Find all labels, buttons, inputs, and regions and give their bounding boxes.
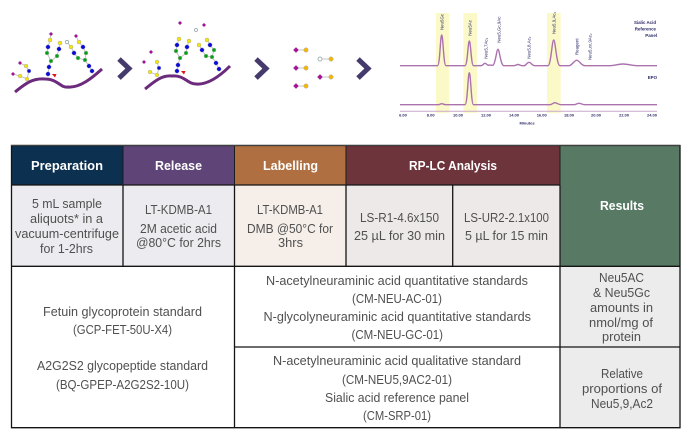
workflow table bbox=[11, 145, 680, 428]
text: relative result bbox=[582, 367, 663, 411]
text: relative result: Relative bbox=[601, 367, 643, 381]
text: release method: @80°C for 2hrs bbox=[136, 236, 221, 250]
text: preparation method bbox=[15, 197, 119, 256]
chromatogram chart: Panel bbox=[645, 33, 657, 38]
heading: RP-LC Analysis: RP-LC Analysis bbox=[409, 158, 497, 173]
chromatogram chart: Reagent bbox=[574, 38, 579, 55]
text: quantitative standards: (CM-NEU-GC-01) bbox=[352, 328, 443, 342]
text: preparation method: vacuum-centrifuge bbox=[15, 227, 119, 241]
chromatogram chart: Reference bbox=[635, 26, 657, 32]
text: qualitative standards bbox=[273, 354, 521, 423]
text: labelling method: DMB @50°C for bbox=[247, 222, 333, 236]
chromatogram chart: Neu5,Gc,9Ac bbox=[496, 16, 501, 43]
text: quantitative standards bbox=[264, 274, 531, 342]
text: column UR2: 5 µL for 15 min bbox=[465, 229, 548, 243]
panel: method cell fills bbox=[11, 185, 680, 428]
text: qualitative standards: N-acetylneuraminic acid qualitative standard bbox=[273, 354, 521, 368]
text: glycoprotein standards: A2G2S2 glycopeptide standard bbox=[37, 359, 208, 373]
text: release method: 2M acetic acid bbox=[140, 222, 217, 236]
trace: EPO bbox=[400, 73, 657, 105]
text: quantitative result: nmol/mg of bbox=[589, 316, 654, 330]
text: qualitative standards: (CM-SRP-01) bbox=[363, 409, 431, 423]
text: preparation method: 5 mL sample bbox=[32, 197, 102, 211]
chromatogram chart: 18.00 bbox=[564, 112, 575, 118]
chromatogram chart: Neu5,8,Ac₂ bbox=[527, 36, 532, 59]
text: column R1: 25 µL for 30 min bbox=[354, 229, 445, 243]
text: column R1: LS-R1-4.6x150 bbox=[360, 211, 439, 225]
chromatogram chart: 24.00 bbox=[647, 112, 658, 118]
text: qualitative standards: Sialic acid reference panel bbox=[325, 391, 469, 405]
text: relative result: proportions of bbox=[582, 382, 663, 396]
chromatogram chart: Neu5Ac bbox=[467, 19, 472, 36]
text: glycoprotein standards: (GCP-FET-50U-X4) bbox=[73, 323, 172, 337]
chromatogram chart: 16.00 bbox=[537, 112, 547, 118]
chromatogram chart: 6.00 bbox=[399, 112, 408, 118]
text: quantitative result: Neu5AC bbox=[599, 271, 644, 285]
heading: Release: Release bbox=[155, 158, 202, 173]
icon: glycoprotein with released sialic acids bbox=[142, 21, 230, 89]
legend labels: Sialic Acid bbox=[634, 20, 656, 25]
text: glycoprotein standards: Fetuin glycoprotein standard bbox=[43, 305, 202, 319]
grid lines bbox=[12, 146, 680, 428]
text: column UR2: LS-UR2-2.1x100 bbox=[464, 211, 549, 225]
text: column R1 bbox=[354, 211, 445, 243]
chromatogram chart: 20.00 bbox=[591, 112, 602, 118]
chromatogram chart: 12.00 bbox=[481, 112, 492, 118]
chromatogram chart: Minutes bbox=[519, 120, 535, 126]
text: preparation method: for 1-2hrs bbox=[40, 242, 93, 256]
text: qualitative standards: (CM-NEU5,9AC2-01) bbox=[342, 373, 452, 387]
text: quantitative result: protein bbox=[602, 330, 641, 344]
chromatogram chart: Neu5,9,Ac₂ bbox=[552, 11, 557, 34]
trace: sialic acid reference panel bbox=[400, 35, 657, 66]
chromatogram chart bbox=[399, 11, 658, 126]
peak labels: Neu5Gc bbox=[440, 13, 444, 30]
panel: header fills bbox=[11, 145, 680, 266]
icon: intact glycoprotein with sialic acids bbox=[11, 32, 102, 92]
chromatogram chart: 14.00 bbox=[509, 112, 520, 118]
arrow: step one bbox=[119, 59, 129, 78]
text: column UR2 bbox=[464, 211, 549, 243]
chromatogram chart: EPO bbox=[648, 75, 658, 80]
icon: labelled sialic acids bbox=[293, 47, 333, 89]
text: labelling method: 3hrs bbox=[278, 236, 303, 250]
text: release method: LT-KDMB-A1 bbox=[145, 203, 212, 217]
text: quantitative standards: (CM-NEU-AC-01) bbox=[352, 292, 442, 306]
text: quantitative standards: N-acetylneuraminic acid quantitative standards bbox=[266, 274, 528, 288]
text: labelling method: LT-KDMB-A1 bbox=[257, 203, 323, 217]
chromatogram chart: 22.00 bbox=[619, 112, 630, 118]
chromatogram chart: 10.00 bbox=[453, 112, 464, 118]
heading: Preparation: Preparation bbox=[31, 158, 103, 173]
heading: Results: Results bbox=[600, 198, 644, 213]
text: preparation method: aliquots* in a bbox=[30, 212, 103, 226]
arrow: step two bbox=[256, 59, 266, 78]
x axis bbox=[400, 110, 657, 112]
text: glycoprotein standards: (BQ-GPEP-A2G2S2-10U) bbox=[56, 378, 189, 392]
heading: Labelling: Labelling bbox=[263, 158, 318, 173]
arrow: step three bbox=[358, 59, 368, 78]
text: quantitative result bbox=[589, 271, 654, 344]
text: release method bbox=[136, 203, 221, 250]
chromatogram chart: 8.00 bbox=[427, 112, 435, 118]
chromatogram chart: Neu5,xx,9Ac₂ bbox=[588, 33, 593, 60]
text: labelling method bbox=[247, 203, 333, 250]
text: quantitative result: & Neu5Gc bbox=[593, 286, 650, 300]
text: quantitative result: amounts in bbox=[590, 301, 653, 315]
chromatogram chart: Neu5,7Ac₂ bbox=[483, 37, 488, 59]
text: glycoprotein standards bbox=[37, 305, 208, 392]
text: quantitative standards: N-glycolyneuraminic acid quantitative standards bbox=[264, 310, 531, 324]
text: relative result: Neu5,9,Ac2 bbox=[591, 397, 653, 411]
